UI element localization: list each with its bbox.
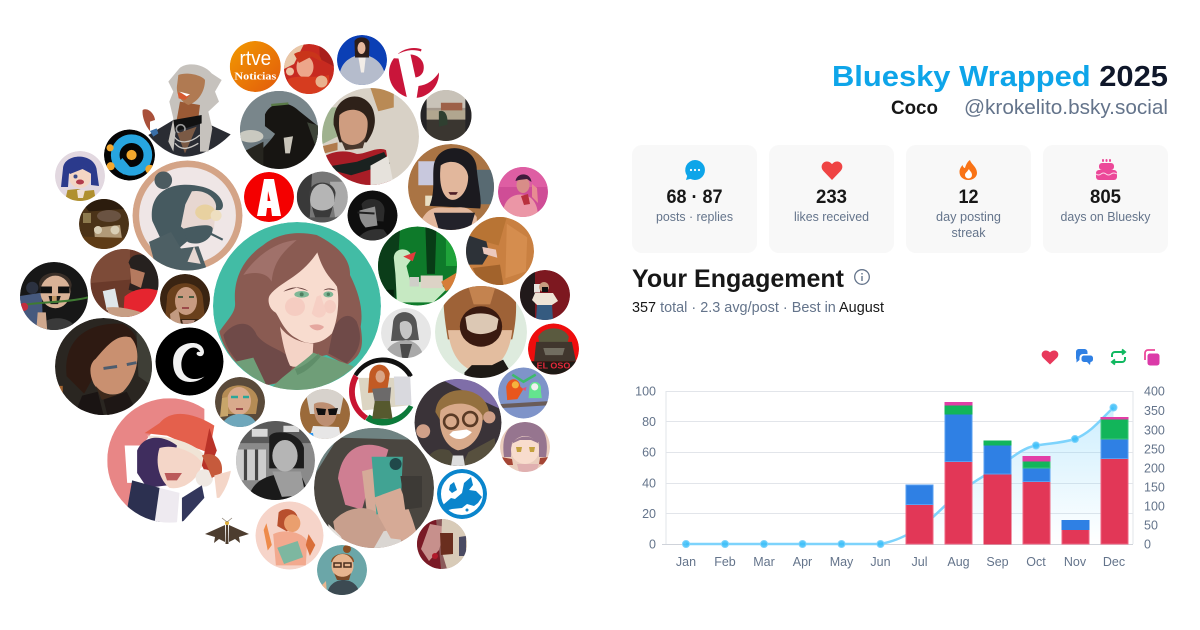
- panel: posts and replies stat: [632, 145, 757, 253]
- avatar: el oso meme: [528, 324, 579, 374]
- avatar: purple bob anime girl: [500, 422, 550, 472]
- bar: Jul: [906, 485, 933, 544]
- left axis labels: 20: [642, 507, 656, 521]
- engagement summary: 357 total · 2.3 avg/post · Best in August: [632, 300, 884, 316]
- cumulative area: [880, 408, 1114, 544]
- right axis labels: 350: [1144, 404, 1165, 418]
- bar: Oct: [1023, 456, 1050, 544]
- month labels: Apr: [793, 555, 812, 569]
- left axis labels: 80: [642, 415, 656, 429]
- avatar: rtve noticias: Noticias: [234, 70, 276, 82]
- icon: speech bubble: [685, 160, 705, 180]
- avatar: teal cartoon man: [317, 545, 367, 595]
- icon: likes heart: [1042, 351, 1058, 364]
- avatar: rtve noticias: rtve: [239, 48, 271, 70]
- avatar cluster: [20, 35, 579, 595]
- panel: likes stat: [769, 145, 894, 253]
- avatar: man with brown hair anime: [55, 318, 152, 415]
- icon: cake: [1096, 159, 1117, 180]
- avatar: black c logo: [156, 328, 224, 396]
- bar: Sep: [984, 441, 1011, 544]
- avatar: man in christmas sweater: [322, 88, 419, 185]
- stat label: posts · replies: [656, 209, 733, 224]
- icon: reposts arrows: [1112, 350, 1125, 364]
- panel: days on Bluesky stat: [1043, 145, 1168, 253]
- month labels: Sep: [986, 555, 1009, 569]
- left axis labels: 60: [642, 446, 656, 460]
- stat value: 233: [816, 186, 847, 208]
- avatar: man in red shirt reading: [90, 249, 158, 317]
- stat label: day posting: [936, 209, 1001, 224]
- month labels: Feb: [714, 555, 736, 569]
- avatar: black goat painting: [238, 91, 318, 169]
- panel: streak stat: [906, 145, 1031, 253]
- icon: quotes squares: [1145, 350, 1160, 366]
- avatar: black and white man in profile: [348, 190, 398, 240]
- avatar: red illustrated face: [284, 44, 334, 94]
- stat label: days on Bluesky: [1060, 209, 1151, 224]
- avatar: woman with pink hair and phone: [314, 428, 434, 548]
- cumulative dots: [682, 404, 1117, 548]
- chart grid: [666, 391, 1133, 544]
- avatar: man with rose and fake glasses: [20, 262, 88, 330]
- avatar: woman in palestine ring: [348, 357, 417, 426]
- month labels: Jun: [870, 555, 891, 569]
- icon: replies bubbles: [1076, 349, 1093, 365]
- user handle: @krokelito.bsky.social: [964, 97, 1168, 119]
- right axis labels: 300: [1144, 424, 1165, 438]
- left axis labels: [635, 384, 656, 552]
- icon: flame: [960, 160, 977, 180]
- month labels: May: [830, 555, 854, 569]
- avatar: pink portrait: [498, 167, 548, 217]
- month labels: [676, 555, 1125, 569]
- avatar: laughing man with glasses: [414, 379, 502, 466]
- left axis labels: 100: [635, 384, 656, 398]
- chart: monthly engagement: [635, 384, 1165, 569]
- avatar: man with bun, tan ring: [132, 160, 242, 270]
- month labels: Oct: [1026, 555, 1046, 569]
- avatar: curly red hair: [466, 217, 534, 285]
- stat label second line: streak: [952, 225, 986, 240]
- avatar: el oso meme: EL OSO: [537, 361, 570, 370]
- right axis labels: 0: [1144, 538, 1151, 552]
- month labels: Mar: [753, 555, 775, 569]
- bar: Dec: [1101, 418, 1128, 544]
- avatar: restaurant painting: [79, 199, 129, 249]
- month labels: Aug: [947, 555, 970, 569]
- user name: Coco: [891, 97, 938, 119]
- stat label: likes received: [794, 209, 869, 224]
- month labels: Jul: [912, 555, 927, 569]
- month labels: Nov: [1064, 555, 1087, 569]
- avatar: rtve noticias: [230, 41, 281, 92]
- heading: your engagement: Your Engagement: [632, 265, 845, 293]
- avatar: pixel birds: [498, 368, 549, 418]
- right axis labels: 100: [1144, 500, 1165, 514]
- avatar: person with phone on maroon: [520, 270, 570, 320]
- avatar: europe map logo: [437, 469, 487, 519]
- avatar: silver-haired character: [143, 64, 231, 157]
- right axis labels: 200: [1144, 462, 1165, 476]
- avatar: man in sunglasses: [300, 389, 350, 439]
- avatar: kermit drawing: [378, 226, 457, 306]
- avatar: blue-haired anime girl: [55, 151, 105, 201]
- stat value: 68 · 87: [666, 186, 722, 208]
- right axis labels: 250: [1144, 442, 1165, 456]
- avatar: close-up mouth: [435, 286, 527, 378]
- left axis labels: 40: [642, 476, 656, 490]
- cumulative line behind bars: [686, 408, 1114, 544]
- avatar: balcony view: [420, 90, 472, 141]
- avatar: main profile portrait: [213, 222, 381, 391]
- avatar: moth: [205, 518, 249, 544]
- stat value: 12: [958, 186, 979, 208]
- right axis labels: 50: [1144, 518, 1158, 532]
- avatar: blue circle logo: [104, 130, 155, 180]
- avatar: woman with dark fringe: [408, 144, 494, 230]
- chart legend icons: [1042, 349, 1160, 366]
- stacked bars: [906, 402, 1128, 544]
- avatar: illustrated woman with book: [256, 502, 324, 570]
- right axis labels: 400: [1144, 384, 1165, 398]
- right axis labels: 150: [1144, 480, 1165, 494]
- month labels: Dec: [1103, 555, 1125, 569]
- bar: Aug: [945, 402, 972, 544]
- avatar: grey bearded man: [297, 172, 348, 222]
- icon: info: [855, 270, 869, 284]
- avatar: woman on blue background: [337, 35, 387, 85]
- avatar: P logo: [389, 47, 440, 99]
- avatar: girl with hand on face: [160, 274, 210, 324]
- stat value: 805: [1090, 186, 1121, 208]
- title: Bluesky Wrapped 2025: [832, 61, 1168, 93]
- month labels: Jan: [676, 555, 696, 569]
- avatar: black and white woman with books: [236, 421, 315, 500]
- avatar: grayscale woman: [381, 308, 431, 358]
- avatar: red A logo: [244, 172, 294, 222]
- avatar: woman with teal eyeshadow: [215, 377, 265, 427]
- avatar: hand with red nails: [417, 519, 467, 569]
- bar: Nov: [1062, 520, 1089, 544]
- avatar: santa hat anime: [107, 398, 232, 523]
- icon: heart: [822, 162, 842, 180]
- right axis labels: [1144, 384, 1165, 552]
- left axis labels: 0: [649, 538, 656, 552]
